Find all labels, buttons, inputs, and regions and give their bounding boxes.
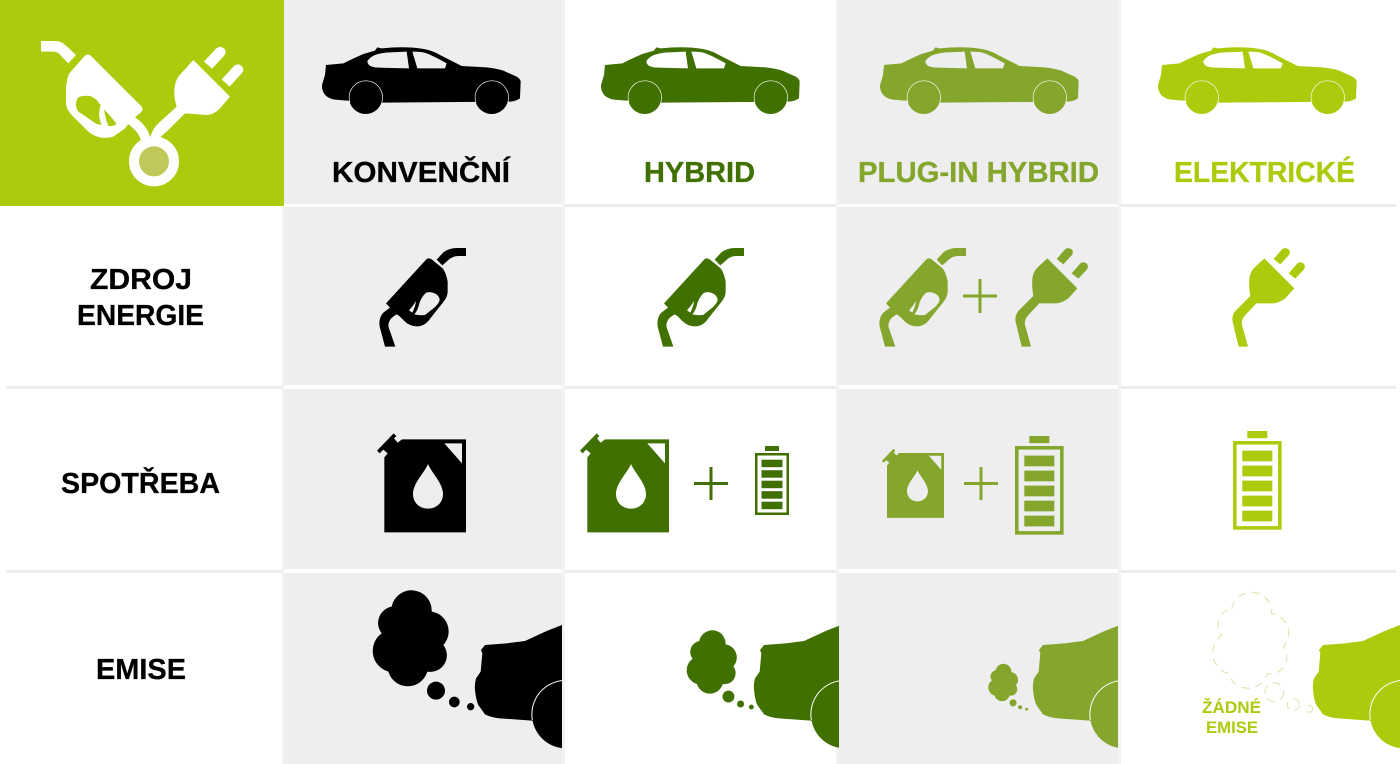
icon: fuel pump [879,248,966,347]
row label: zdroj energie: ZDROJ [90,264,192,296]
grey column backgrounds [284,0,1118,764]
column heading: ELEKTRICKÉ [1174,155,1355,189]
icon: dashed empty cloud [1213,592,1313,712]
column: plug-in hybrid [860,47,1118,748]
row label: spotřeba: SPOTŘEBA [61,466,220,500]
icon: small exhaust cloud [988,664,1028,711]
column heading: PLUG-IN HYBRID [858,157,1099,189]
icon: small canister [882,449,944,518]
icon: fuel pump [379,248,466,347]
no emissions label [1202,698,1261,737]
column: konvenční [322,47,562,748]
icon: battery [1017,436,1062,533]
icon: plus [964,467,998,500]
row label: zdroj energie: ENERGIE [77,300,204,332]
row label: zdroj energie [77,264,204,332]
icon: medium exhaust cloud [687,630,754,710]
column: elektrické [1158,47,1400,748]
icon: battery [1235,431,1280,528]
icon: car [880,47,1079,114]
no emissions label: ŽÁDNÉ [1202,698,1261,717]
header panel: fuel and electric icon [0,0,284,206]
icon: car rear [1313,617,1400,748]
icon: car rear [1032,626,1118,748]
icon: car [601,47,800,114]
icon: plug [1232,248,1305,347]
icon: battery [756,446,788,514]
icon: canister [580,433,669,532]
icon: fuel pump [657,248,744,347]
icon: canister [377,433,466,532]
icon: large exhaust cloud [373,590,474,710]
column heading: HYBRID [644,157,755,189]
column heading: KONVENČNÍ [332,155,511,189]
column: hybrid [580,47,839,748]
icon: car [1158,47,1357,114]
icon: fuel nozzle and plug [41,41,243,181]
icon: plus [963,279,997,313]
icon: car [322,47,521,114]
icon: plug [1015,248,1088,347]
row label: emise: EMISE [96,654,186,686]
icon: car rear [754,626,839,748]
icon: car rear [474,625,562,748]
no emissions label: EMISE [1206,718,1258,737]
icon: plus [694,467,728,500]
